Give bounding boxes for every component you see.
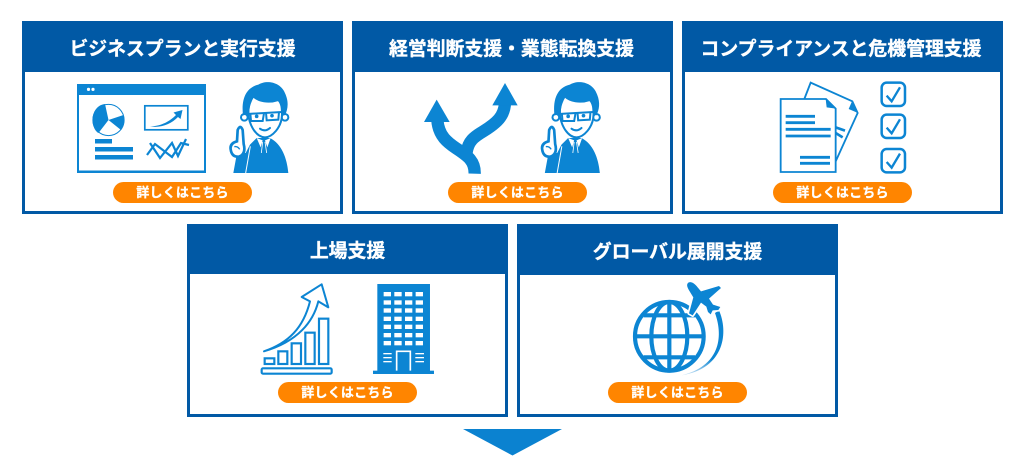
icon: checklist [882,83,905,172]
heading [685,24,1000,72]
button [113,182,252,203]
icon: dashboard window [77,84,206,173]
panel: グローバル展開支援 [517,224,838,417]
arrow: down [463,429,562,456]
icon: businessman [542,82,600,173]
panel: 経営判断支援・業態転換支援 [352,21,673,214]
button: 詳しくはこちら [471,185,564,200]
heading [190,227,505,274]
button: 詳しくはこちら [136,185,229,200]
button: 詳しくはこちら [796,185,889,200]
button [448,182,587,203]
panel: コンプライアンスと危機管理支援 [682,21,1003,214]
heading [25,24,340,72]
icon: globe with airplane [635,282,723,375]
illustration: compliance [780,81,906,174]
icon: rising bar chart [262,284,332,374]
icon: businessman [231,82,288,173]
illustration: business decision [424,82,601,174]
icon: forked arrows [424,83,518,174]
heading: グローバル展開支援 [593,241,762,262]
heading [355,24,670,72]
panel: 上場支援 [187,224,508,417]
illustration: global expansion [632,282,724,376]
button [773,182,912,203]
icon: office building [373,284,434,374]
button [608,382,747,403]
button [278,382,417,403]
illustration: business plan [77,82,290,173]
panel: ビジネスプランと実行支援 [22,21,343,214]
heading: 経営判断支援・業態転換支援 [389,38,634,59]
heading [520,227,835,275]
illustration: IPO [260,283,434,375]
icon: documents [781,83,858,172]
button: 詳しくはこちら [301,385,394,400]
heading: コンプライアンスと危機管理支援 [701,38,981,59]
heading: 上場支援 [310,240,385,261]
heading: ビジネスプランと実行支援 [69,38,296,59]
button: 詳しくはこちら [631,385,724,400]
